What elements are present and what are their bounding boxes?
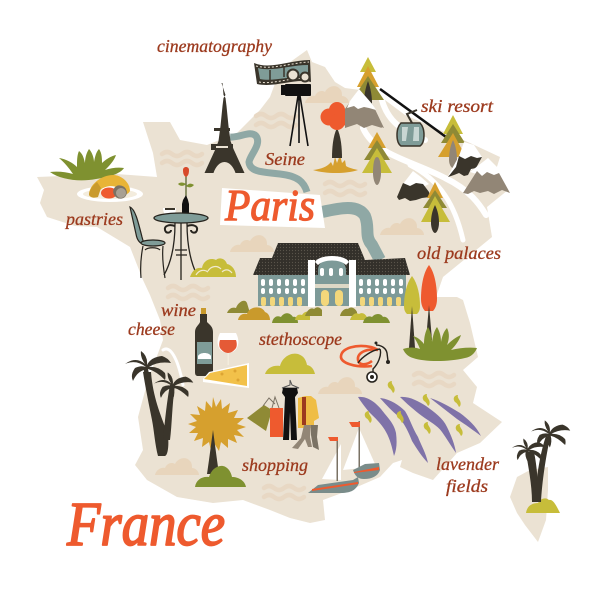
yellow jacket: [298, 396, 319, 428]
lavender leaves: [365, 381, 463, 436]
pine tree middle: [362, 132, 392, 185]
pine tree right: [438, 115, 466, 168]
rose in vase: [178, 167, 194, 221]
label lavender fields: lavender: [436, 454, 500, 474]
palm trees left: [125, 351, 193, 456]
stethoscope: [341, 342, 390, 382]
dark mountain centre: [397, 171, 430, 201]
title France: France: [66, 491, 225, 559]
cable car: [380, 89, 446, 146]
map of Corsica: [510, 467, 548, 542]
windows ground yellow: [261, 290, 401, 306]
label lavender fields: fields: [446, 476, 488, 496]
green bush bottom: [195, 466, 246, 487]
wine glass: [218, 333, 238, 365]
sailing boats: [308, 421, 380, 493]
walls: [258, 256, 406, 307]
golden palm tree: [188, 397, 246, 474]
label cinematography: cinematography: [157, 36, 272, 56]
label stethoscope: stethoscope: [259, 329, 342, 349]
table: [154, 213, 208, 280]
label lavender fields: [436, 454, 500, 496]
river Seine: [230, 134, 380, 260]
chair: [130, 207, 165, 278]
Corsica palms and bush: [512, 420, 570, 513]
dark mountain right: [448, 142, 482, 177]
lavender rows: [358, 397, 481, 463]
pine tree top: [352, 57, 384, 111]
mountain grey left: [345, 89, 384, 128]
pine tree lower: [421, 182, 450, 233]
palace: [253, 243, 410, 307]
red cypress tree: [421, 265, 437, 340]
label wine: wine: [161, 300, 196, 320]
label pastries: pastries: [64, 209, 123, 229]
map of France: [37, 50, 508, 523]
boots: [292, 425, 319, 450]
label cheese: cheese: [128, 319, 175, 339]
orange tree with grass: [313, 102, 358, 173]
Paris heading: Paris: [224, 181, 315, 230]
yellow hill: [265, 354, 315, 374]
label shopping: shopping: [242, 455, 308, 475]
shopping items: [247, 380, 319, 450]
movie camera on tripod: [281, 84, 311, 146]
label Seine: Seine: [265, 149, 305, 169]
label old palaces: old palaces: [417, 243, 501, 263]
windows upper: [261, 268, 403, 294]
roofs: [253, 243, 410, 275]
decorative clouds: [155, 86, 424, 475]
white valley stripes: [163, 92, 486, 385]
Paris label panel: [220, 188, 325, 228]
cafe table with cup and rose: [130, 167, 208, 280]
coffee cup: [160, 208, 180, 218]
bushes below palace: [227, 301, 390, 323]
decorative wave marks: [162, 114, 454, 499]
black dress: [282, 380, 299, 440]
green bush with pastries plate: [50, 149, 143, 202]
wine bottle: [195, 308, 213, 376]
label ski resort: ski resort: [421, 96, 494, 116]
yellow cypress tree: [404, 276, 420, 348]
grey mountain far right: [463, 158, 510, 194]
film strip: [254, 60, 311, 85]
cheese wedge: [203, 363, 249, 388]
olive bag: [247, 398, 275, 431]
red bag: [270, 397, 283, 437]
green bush right: [403, 327, 477, 361]
Eiffel tower: [204, 83, 244, 173]
yellow shrub near table: [190, 258, 236, 277]
